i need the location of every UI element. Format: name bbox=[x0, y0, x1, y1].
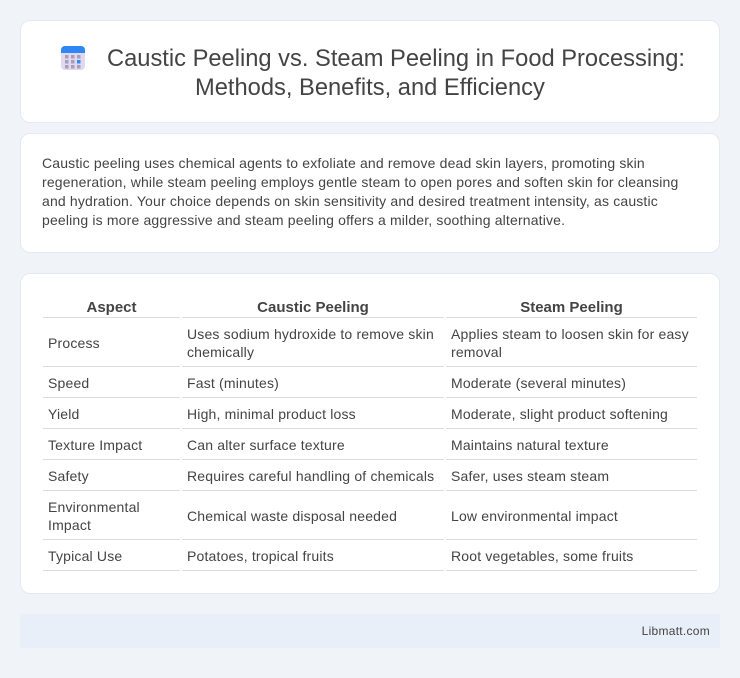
title bbox=[107, 46, 685, 101]
comparison table: Low environmental impact bbox=[451, 508, 618, 524]
comparison table: High, minimal product loss bbox=[187, 406, 356, 422]
comparison table: Speed bbox=[48, 375, 89, 391]
comparison table: Environmental bbox=[48, 499, 140, 515]
comparison table: Uses sodium hydroxide to remove skin bbox=[187, 326, 434, 342]
comparison table: Safety bbox=[48, 468, 89, 484]
comparison table: Aspect bbox=[86, 299, 137, 316]
comparison table: Texture Impact bbox=[48, 437, 142, 453]
comparison table: Potatoes, tropical fruits bbox=[187, 548, 334, 564]
header panel bbox=[20, 20, 720, 123]
table panel bbox=[20, 273, 720, 594]
comparison table: Impact bbox=[48, 517, 91, 533]
intro text: regeneration, while steam peeling employs gentle steam to open pores and soften skin for cleansing bbox=[42, 174, 678, 190]
comparison table: Root vegetables, some fruits bbox=[451, 548, 633, 564]
comparison table: Applies steam to loosen skin for easy bbox=[451, 326, 689, 342]
comparison table: Steam Peeling bbox=[520, 299, 623, 316]
intro text: and hydration. Your choice depends on skin sensitivity and desired treatment intensity, as caustic bbox=[42, 193, 658, 209]
intro panel bbox=[20, 133, 720, 253]
comparison table: Yield bbox=[48, 406, 80, 422]
comparison table: Moderate, slight product softening bbox=[451, 406, 668, 422]
intro text bbox=[42, 155, 678, 228]
title: Caustic Peeling vs. Steam Peeling in Food Processing: bbox=[107, 46, 685, 72]
footer credit: Libmatt.com bbox=[642, 624, 710, 638]
comparison table: Chemical waste disposal needed bbox=[187, 508, 397, 524]
comparison table: chemically bbox=[187, 344, 254, 360]
intro text: peeling is more aggressive and steam peeling offers a milder, soothing alternative. bbox=[42, 212, 565, 228]
comparison table: Process bbox=[48, 335, 100, 351]
comparison table: Safer, uses steam steam bbox=[451, 468, 609, 484]
footer bar bbox=[20, 614, 720, 648]
comparison table: Fast (minutes) bbox=[187, 375, 279, 391]
comparison table: Caustic Peeling bbox=[257, 299, 369, 316]
intro text: Caustic peeling uses chemical agents to exfoliate and remove dead skin layers, promoting skin bbox=[42, 155, 645, 171]
comparison table: Moderate (several minutes) bbox=[451, 375, 626, 391]
comparison table: removal bbox=[451, 344, 502, 360]
comparison table: Typical Use bbox=[48, 548, 122, 564]
comparison table: Maintains natural texture bbox=[451, 437, 609, 453]
comparison table: Can alter surface texture bbox=[187, 437, 345, 453]
icon: calendar bbox=[61, 46, 85, 70]
comparison table: Requires careful handling of chemicals bbox=[187, 468, 434, 484]
title: Methods, Benefits, and Efficiency bbox=[195, 75, 545, 101]
